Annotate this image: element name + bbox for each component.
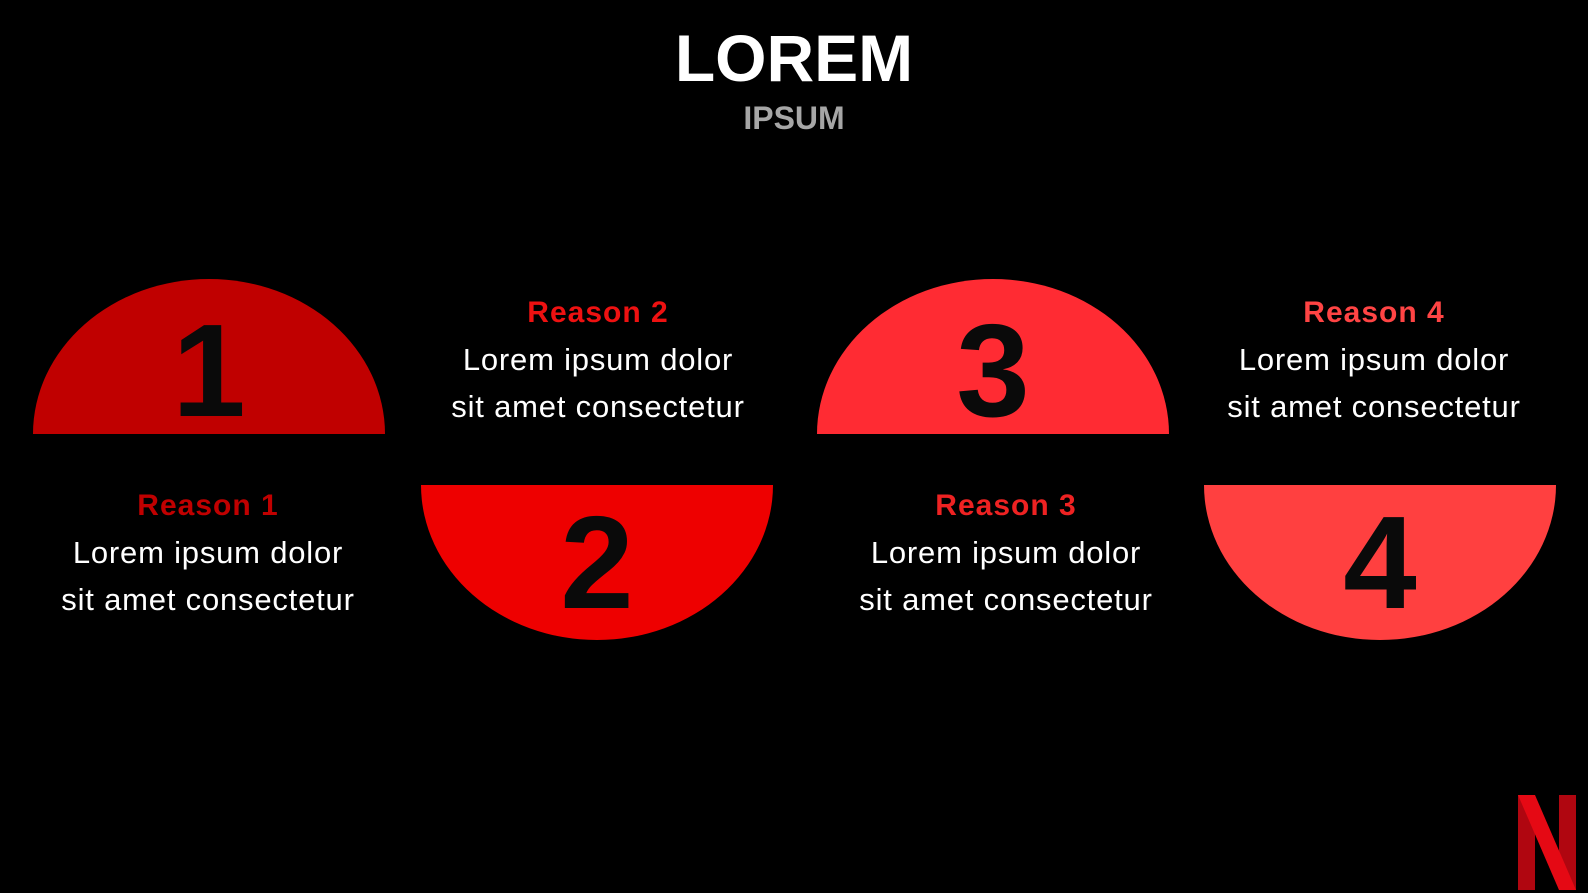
step 1 text: sit amet consectetur xyxy=(61,582,355,617)
step 4 text: Reason 4 xyxy=(1303,296,1445,329)
step 3 text xyxy=(859,489,1153,617)
step 4 text xyxy=(1227,296,1521,424)
step 2 text: sit amet consectetur xyxy=(451,389,745,424)
step 1 half circle xyxy=(33,279,385,434)
step 4 half circle xyxy=(1204,485,1556,640)
step 3 text: Lorem ipsum dolor xyxy=(871,535,1141,570)
step 3 text: sit amet consectetur xyxy=(859,582,1153,617)
step 1 text: Lorem ipsum dolor xyxy=(73,535,343,570)
step 3 half circle: 3 xyxy=(956,297,1030,444)
step 3 half circle xyxy=(817,279,1169,434)
title: LOREM xyxy=(675,21,913,95)
step 2 half circle: 2 xyxy=(560,489,634,636)
step 1 half circle: 1 xyxy=(172,297,246,444)
step 4 half circle: 4 xyxy=(1343,489,1417,636)
step 2 half circle xyxy=(421,485,773,640)
step 4 text: Lorem ipsum dolor xyxy=(1239,342,1509,377)
step 4 text: sit amet consectetur xyxy=(1227,389,1521,424)
step 1 text: Reason 1 xyxy=(137,489,279,522)
step 2 text: Reason 2 xyxy=(527,296,669,329)
step 3 text: Reason 3 xyxy=(935,489,1077,522)
subtitle: IPSUM xyxy=(743,100,845,136)
step 2 text xyxy=(451,296,745,424)
icon: netflix logo xyxy=(1518,795,1576,890)
step 1 text xyxy=(61,489,355,617)
step 2 text: Lorem ipsum dolor xyxy=(463,342,733,377)
